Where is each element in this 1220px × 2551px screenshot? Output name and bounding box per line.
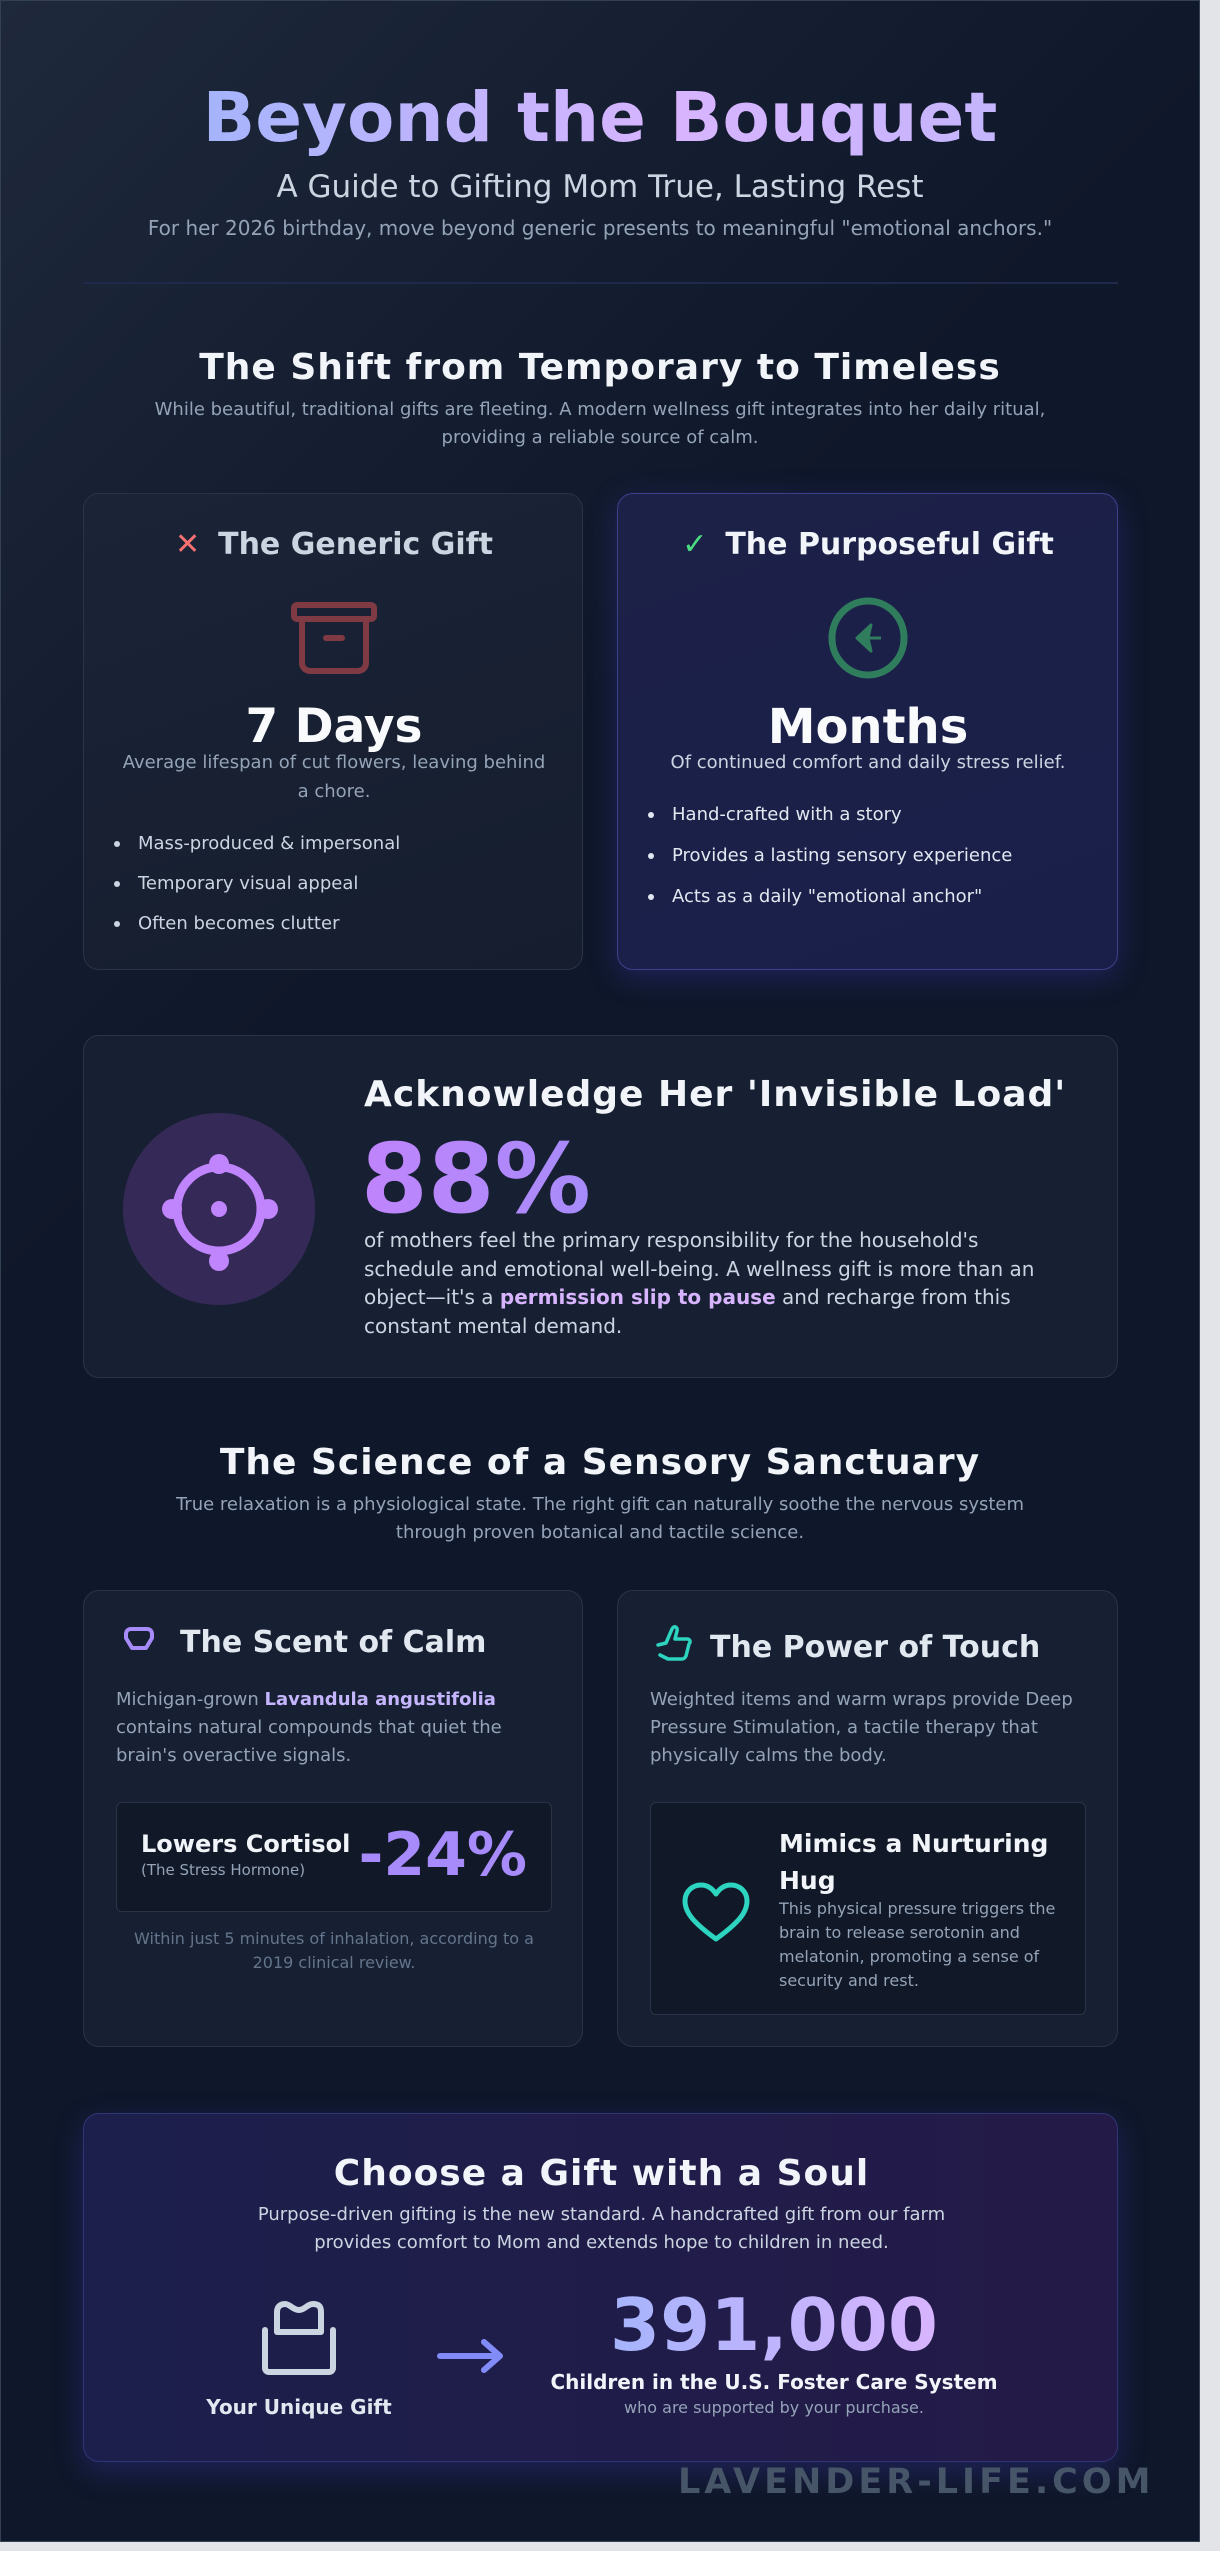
stat box: cortisol bbox=[116, 1802, 552, 1912]
text: touch body: Weighted items and warm wraps provide Deep Pressure Stimulation, a tactile therapy that physically calms the body. bbox=[650, 1689, 1073, 1766]
brand footer: LAVENDER-LIFE.COM bbox=[678, 2462, 1154, 2502]
heading: touch: The Power of Touch bbox=[710, 1630, 1040, 1665]
caption: cortisol source: Within just 5 minutes of inhalation, according to a 2019 clinical review. bbox=[134, 1929, 534, 1972]
label: foster care: Children in the U.S. Foster Care System bbox=[550, 2370, 998, 2394]
list: generic: Mass-produced & impersonal bbox=[138, 833, 400, 854]
text: invisible load body: of mothers feel the primary responsibility for the household's schedule and emotional well-being. A wellness gift is more than an object—it's a permission slip to pause and recharge from this constant mental demand. bbox=[364, 1228, 1034, 1338]
arrow bbox=[437, 2339, 503, 2373]
heading: invisible load: Acknowledge Her 'Invisible Load' bbox=[364, 1074, 1066, 1115]
stat: 7 days: 7 Days bbox=[246, 699, 422, 754]
box: nurturing hug: Mimics a Nurturing Hug bbox=[779, 1829, 1048, 1895]
panel: gift with a soul bbox=[83, 2113, 1118, 2462]
list: generic: Temporary visual appeal bbox=[138, 873, 358, 894]
icon: gift bag bbox=[262, 2301, 336, 2375]
list: purposeful: Hand-crafted with a story bbox=[672, 804, 902, 825]
tagline: For her 2026 birthday, move beyond generic presents to meaningful "emotional anchors." bbox=[148, 216, 1052, 240]
list: purposeful bbox=[648, 804, 1012, 907]
stat: months: Months bbox=[768, 699, 968, 755]
text: purposeful desc: Of continued comfort and daily stress relief. bbox=[671, 752, 1065, 773]
panel: power of touch bbox=[617, 1590, 1118, 2047]
heading: generic gift: ✕ The Generic Gift bbox=[175, 527, 493, 562]
title: Beyond the Bouquet bbox=[203, 78, 997, 158]
list: generic bbox=[114, 833, 400, 934]
heading: soul: Choose a Gift with a Soul bbox=[334, 2153, 869, 2194]
panel: invisible load bbox=[83, 1035, 1118, 1378]
list: purposeful: Provides a lasting sensory experience bbox=[672, 845, 1012, 866]
list: purposeful: Acts as a daily "emotional anchor" bbox=[672, 886, 982, 907]
panel: purposeful gift bbox=[617, 493, 1118, 970]
box: nurturing hug bbox=[650, 1802, 1086, 2015]
icon: heart bbox=[682, 1882, 750, 1942]
stat: 88%: 88% bbox=[361, 1123, 591, 1235]
text: scent body: Michigan-grown Lavandula angustifolia contains natural compounds that quiet the brain's overactive signals. bbox=[116, 1689, 502, 1766]
panel: scent of calm bbox=[83, 1590, 583, 2047]
text: science intro: True relaxation is a physiological state. The right gift can naturally soothe the nervous system through proven botanical and tactile science. bbox=[176, 1494, 1024, 1543]
label: your unique gift: Your Unique Gift bbox=[206, 2395, 392, 2419]
subtitle: A Guide to Gifting Mom True, Lasting Rest bbox=[276, 169, 924, 205]
heading: shift: The Shift from Temporary to Timeless bbox=[199, 347, 1001, 388]
text: generic desc: Average lifespan of cut flowers, leaving behind a chore. bbox=[123, 752, 545, 802]
panel: generic gift bbox=[83, 493, 583, 970]
icon: archive box bbox=[291, 602, 377, 674]
text: soul intro: Purpose-driven gifting is the new standard. A handcrafted gift from our farm provides comfort to Mom and extends hope to children in need. bbox=[258, 2204, 945, 2253]
icon: target circle bbox=[123, 1113, 315, 1305]
heading: purposeful gift: ✓ The Purposeful Gift bbox=[682, 527, 1054, 562]
icon: green compass bbox=[828, 598, 908, 678]
text: shift intro: While beautiful, traditional gifts are fleeting. A modern wellness gift integrates into her daily ritual, providing a reliable source of calm. bbox=[155, 399, 1045, 448]
stat box: cortisol: Lowers Cortisol bbox=[141, 1830, 350, 1858]
box: nurturing hug: This physical pressure triggers the brain to release serotonin and melatonin, promoting a sense of security and rest. bbox=[779, 1899, 1055, 1990]
stat box: cortisol: (The Stress Hormone) bbox=[141, 1861, 305, 1879]
heading: scent: The Scent of Calm bbox=[180, 1625, 486, 1660]
list: generic: Often becomes clutter bbox=[138, 913, 339, 934]
heading: science: The Science of a Sensory Sanctuary bbox=[220, 1442, 980, 1483]
stat box: cortisol: -24% bbox=[358, 1820, 527, 1890]
caption: supported: who are supported by your purchase. bbox=[624, 2398, 924, 2417]
stat: 391,000: 391,000 bbox=[610, 2283, 938, 2367]
